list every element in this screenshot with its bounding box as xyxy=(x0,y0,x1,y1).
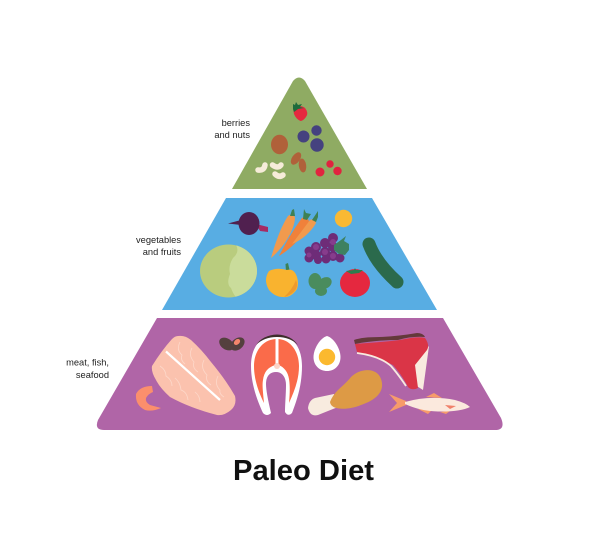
icon: shrimp xyxy=(136,386,161,411)
icon: walnut xyxy=(271,135,288,154)
icon: mussel xyxy=(217,335,247,353)
icon: fish fillet xyxy=(152,336,236,415)
label: vegetables and fruits: vegetables xyxy=(136,235,181,245)
icon: cabbage xyxy=(200,244,257,298)
title: Paleo Diet xyxy=(233,455,375,487)
label: meat, fish, seafood: seafood xyxy=(76,370,109,380)
icon: yellow fruit xyxy=(335,210,352,227)
icon: spinach xyxy=(308,273,334,296)
icon: carrots xyxy=(271,209,318,258)
icon: blueberries xyxy=(298,125,324,152)
label: vegetables and fruits: and fruits xyxy=(143,247,181,257)
icon: yellow pepper xyxy=(266,263,298,297)
icon: chicken leg xyxy=(308,370,382,415)
label: berries and nuts: berries xyxy=(222,118,250,128)
icon: strawberry xyxy=(293,102,307,121)
icon: salmon steak xyxy=(251,334,302,415)
label: meat, fish, seafood: meat, fish, xyxy=(66,358,109,368)
icon: egg xyxy=(314,336,340,371)
icon: t-bone steak xyxy=(354,333,429,390)
icon: beet xyxy=(228,212,268,235)
icon: cashews xyxy=(258,165,283,176)
icon: red berries xyxy=(316,160,342,176)
icon: grapes xyxy=(304,233,349,264)
icon: tomato xyxy=(340,268,370,297)
icon: fish xyxy=(389,393,470,414)
icon: cucumber xyxy=(369,244,397,282)
panel: vegetables and fruits tier xyxy=(162,198,437,310)
panel: berries and nuts tier xyxy=(232,78,367,189)
icon: almonds xyxy=(289,150,307,173)
panel: meat, fish, seafood tier xyxy=(97,318,503,430)
label: berries and nuts: and nuts xyxy=(214,130,250,140)
